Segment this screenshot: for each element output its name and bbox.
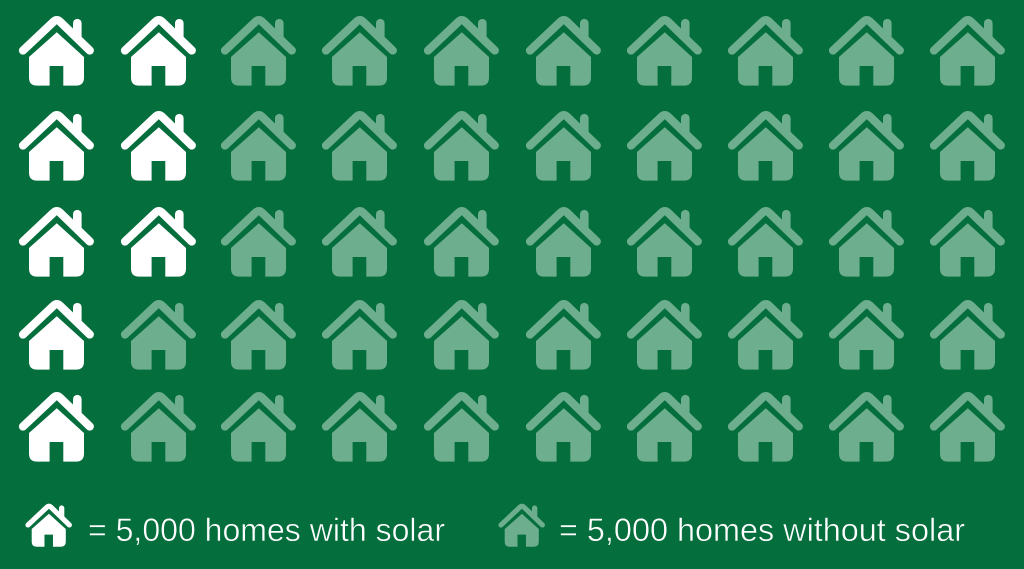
home without solar xyxy=(428,395,495,462)
home without solar xyxy=(428,210,495,277)
home without solar xyxy=(125,303,192,370)
home without solar xyxy=(530,19,597,86)
home without solar xyxy=(631,19,698,86)
home without solar xyxy=(833,395,900,462)
home without solar xyxy=(732,303,799,370)
home without solar xyxy=(428,114,495,181)
pictogram grid of homes xyxy=(23,19,1001,462)
row 3 of homes xyxy=(23,210,1001,277)
home without solar xyxy=(326,395,393,462)
home without solar xyxy=(326,210,393,277)
home without solar xyxy=(833,303,900,370)
legend text: with solar: = 5,000 homes with solar xyxy=(88,512,445,548)
home without solar xyxy=(833,210,900,277)
home without solar xyxy=(631,395,698,462)
home without solar xyxy=(833,114,900,181)
row 2 of homes xyxy=(23,114,1001,181)
home without solar xyxy=(225,395,292,462)
home without solar xyxy=(631,210,698,277)
row 4 of homes xyxy=(23,303,1001,370)
home without solar xyxy=(934,303,1001,370)
home without solar xyxy=(732,395,799,462)
home without solar xyxy=(934,19,1001,86)
home without solar xyxy=(326,303,393,370)
home without solar xyxy=(428,19,495,86)
row 1 of homes xyxy=(23,19,1001,86)
home without solar xyxy=(530,114,597,181)
home without solar xyxy=(631,114,698,181)
home without solar xyxy=(833,19,900,86)
home with solar xyxy=(125,19,192,86)
home without solar xyxy=(631,303,698,370)
home with solar xyxy=(125,210,192,277)
home without solar xyxy=(934,114,1001,181)
home without solar xyxy=(225,19,292,86)
home without solar xyxy=(326,114,393,181)
legend: homes without solar xyxy=(501,505,965,548)
home without solar xyxy=(125,395,192,462)
home without solar xyxy=(428,303,495,370)
home without solar xyxy=(530,210,597,277)
home without solar xyxy=(530,395,597,462)
home with solar xyxy=(23,114,90,181)
row 5 of homes xyxy=(23,395,1001,462)
home without solar xyxy=(225,303,292,370)
icon: faded house xyxy=(501,505,542,547)
legend: homes with solar xyxy=(28,505,445,548)
home without solar xyxy=(732,114,799,181)
home with solar xyxy=(23,210,90,277)
home without solar xyxy=(934,210,1001,277)
home with solar xyxy=(23,395,90,462)
home without solar xyxy=(225,114,292,181)
home without solar xyxy=(225,210,292,277)
home with solar xyxy=(23,303,90,370)
home with solar xyxy=(23,19,90,86)
home with solar xyxy=(125,114,192,181)
legend text: without solar: = 5,000 homes without solar xyxy=(559,512,965,548)
home without solar xyxy=(326,19,393,86)
home without solar xyxy=(934,395,1001,462)
home without solar xyxy=(732,210,799,277)
home without solar xyxy=(530,303,597,370)
icon: white house xyxy=(28,505,69,547)
home without solar xyxy=(732,19,799,86)
